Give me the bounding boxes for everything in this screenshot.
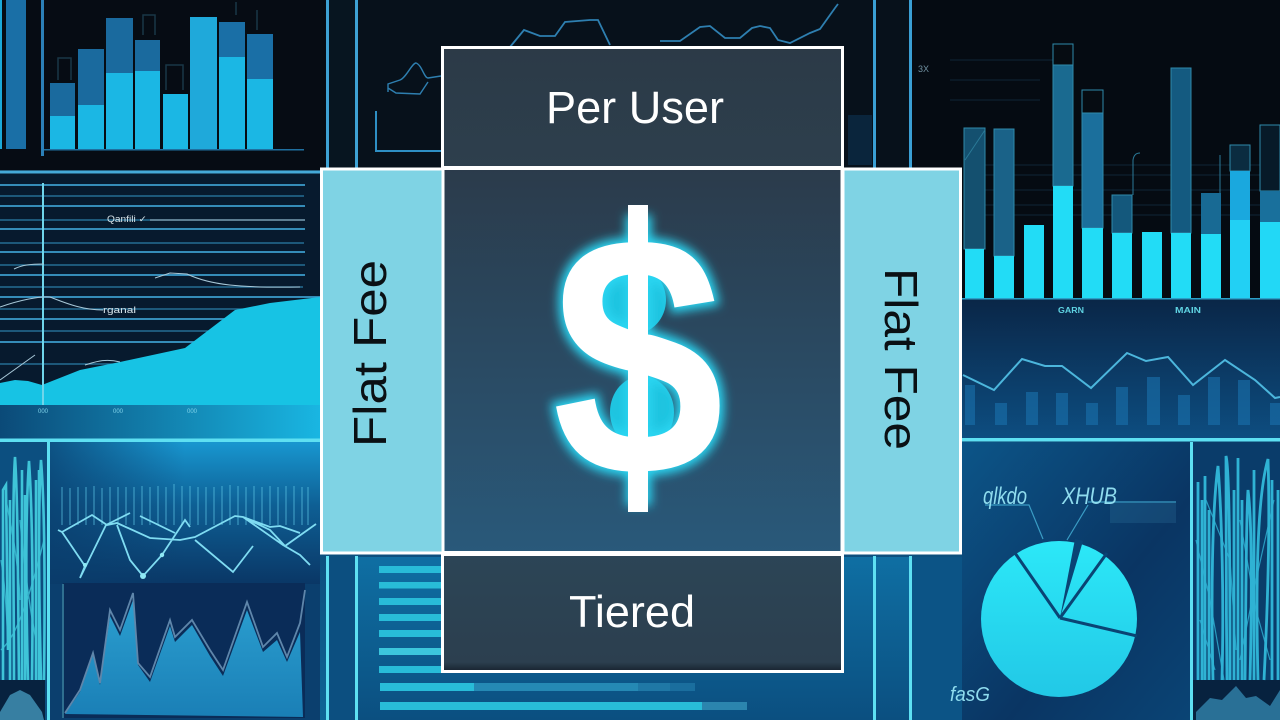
card: left Flat Fee — [322, 169, 444, 553]
panel: right line chart over faded bars — [962, 298, 1280, 442]
label: left Flat Fee: Flat Fee — [344, 260, 396, 447]
heading: Tiered: Tiered — [569, 588, 695, 637]
panel: bottom-centre horizontal bar chart — [326, 556, 912, 720]
chart note labels: Qanfili ✓ — [107, 214, 147, 224]
card: Tiered — [442, 554, 842, 672]
pie callout labels — [950, 483, 1117, 706]
panel: left horizontal line chart with area — [0, 170, 320, 442]
panel: bottom-left line chart — [50, 442, 320, 584]
pie callout labels: fasG — [950, 684, 990, 706]
card: Per User — [442, 48, 842, 168]
card: right Flat Fee — [843, 169, 960, 553]
axis labels: MAIN — [1175, 306, 1201, 315]
panel: bottom-left area chart — [50, 583, 320, 720]
panel: top-right stacked bar chart — [912, 0, 1280, 298]
chart note labels — [103, 214, 147, 315]
panel: left horizontal line chart with area: 000 — [113, 409, 124, 415]
card: centre dollar panel — [443, 164, 842, 552]
panel: bottom-left waveform strip — [0, 442, 50, 720]
panel: top-centre line sketches — [326, 0, 958, 170]
axis labels — [1058, 306, 1201, 315]
panel: bottom-right pie chart — [912, 442, 1190, 720]
label: right Flat Fee: Flat Fee — [875, 268, 927, 450]
panel: left horizontal line chart with area: 000 — [38, 409, 49, 415]
panel: top-left stacked bar chart — [0, 0, 326, 170]
panel: left horizontal line chart with area: 000 — [187, 409, 198, 415]
heading: Per User: Per User — [546, 82, 724, 133]
pie callout labels: qlkdo — [983, 483, 1027, 510]
small top-right label: 3X — [918, 64, 929, 74]
panel: bottom-right waveform strip — [1190, 442, 1280, 720]
pie callout labels: XHUB — [1061, 483, 1117, 510]
icon: glowing dollar sign: $ — [552, 164, 724, 548]
chart note labels: rganal — [103, 305, 136, 315]
axis labels: GARN — [1058, 306, 1084, 315]
icon: glowing dollar sign: $ — [552, 164, 724, 548]
